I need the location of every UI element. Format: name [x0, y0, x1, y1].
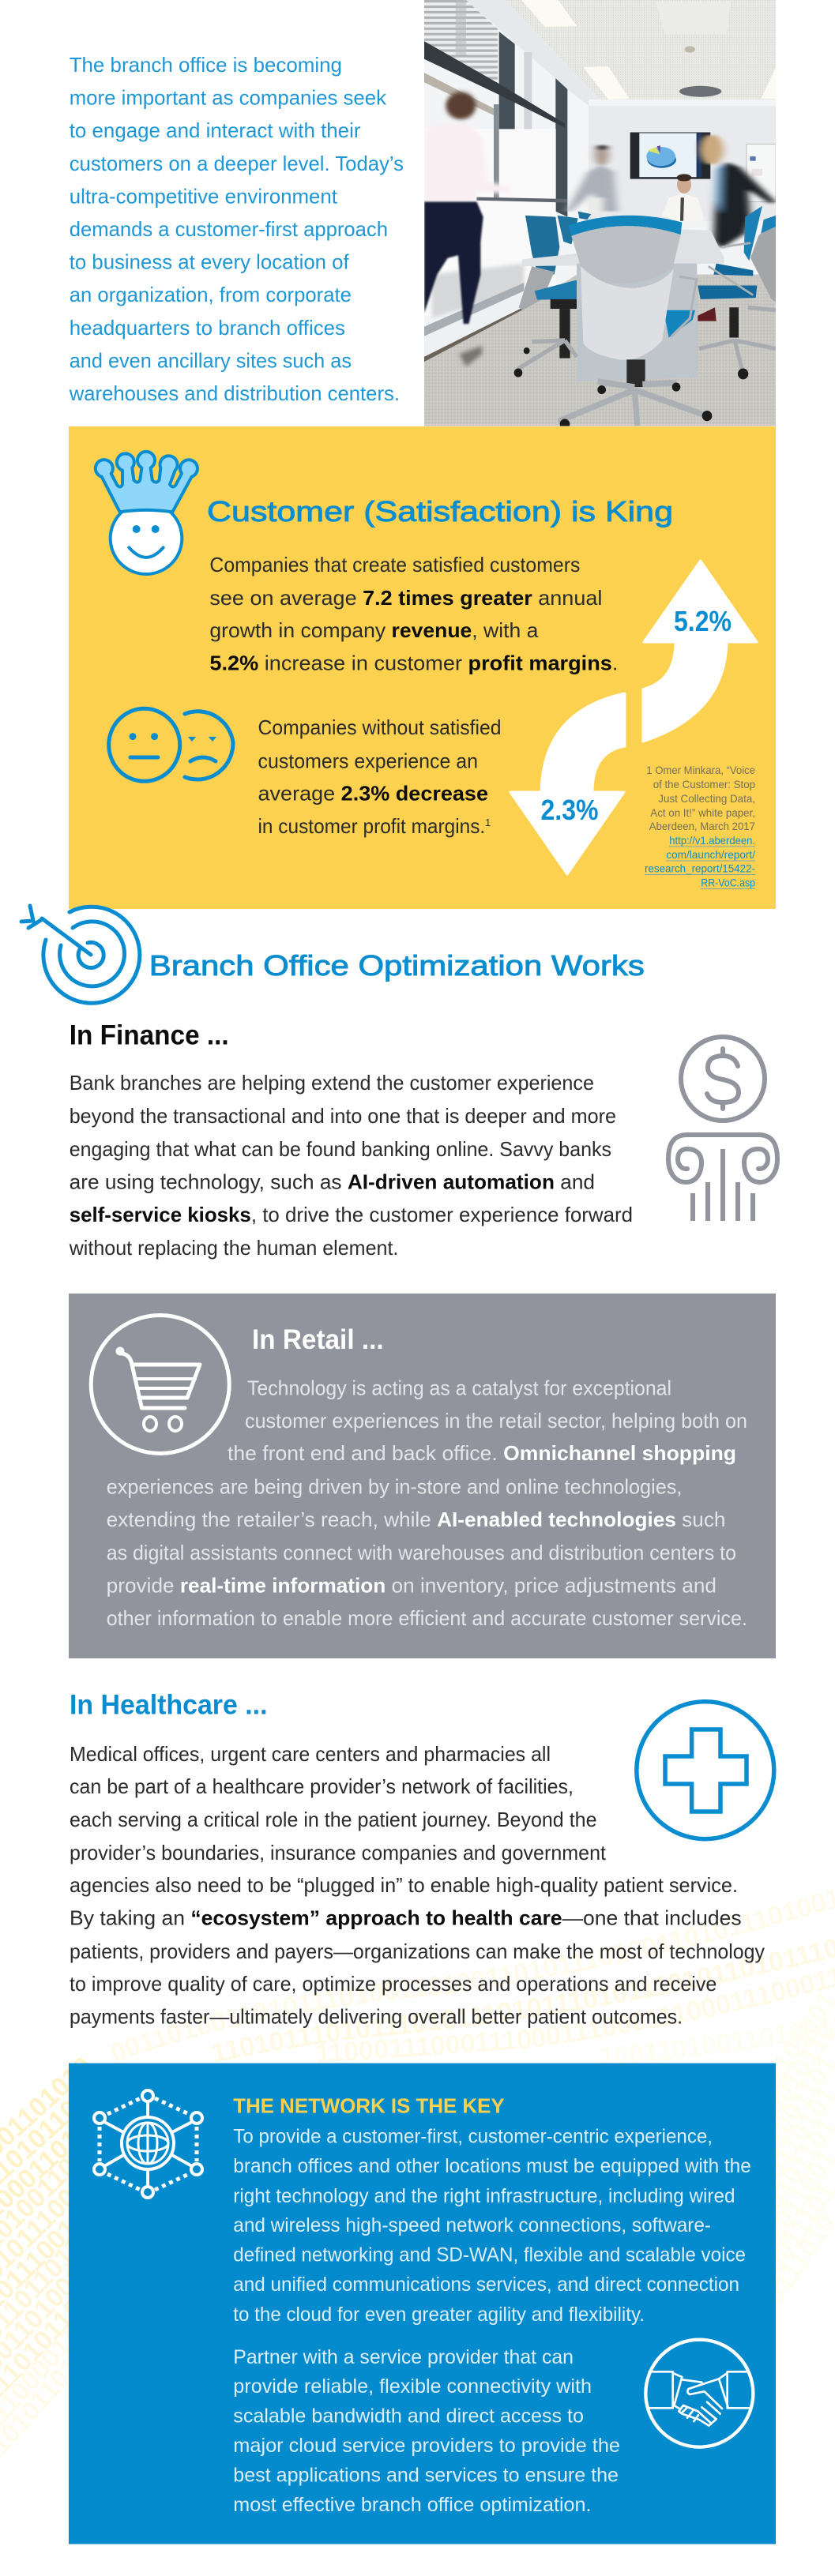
intro paragraph: [69, 53, 404, 405]
icon: dollar coin on column: [668, 1037, 777, 1221]
text: network second paragraph: Partner with a service provider that can: [233, 2346, 574, 2368]
right chair: [698, 206, 776, 379]
text: network second paragraph: provide reliable, flexible connectivity with: [233, 2375, 592, 2398]
text: finance body: Bank branches are helping extend the customer experience: [70, 1071, 594, 1095]
text: finance body: are using technology, such as AI-driven automation and: [70, 1170, 595, 1194]
text: healthcare body: to improve quality of care, optimize processes and operations and receive: [70, 1972, 717, 1996]
text: healthcare body: Medical offices, urgent care centers and pharmacies all: [70, 1742, 551, 1766]
text: healthcare body: each serving a critical role in the patient journey. Beyond the: [70, 1808, 597, 1831]
text: healthcare body: can be part of a healthcare provider’s network of facilities,: [70, 1774, 574, 1798]
arrow: down 2.3%: 2.3%: [540, 794, 599, 826]
text: retail body: other information to enable more efficient and accurate customer service.: [107, 1606, 747, 1630]
text: network second paragraph: [233, 2346, 620, 2516]
text: retail body: as digital assistants connect with warehouses and distribution centers to: [107, 1541, 736, 1564]
text: unsatisfied customers stat: average 2.3% decrease: [258, 782, 488, 805]
text: healthcare body: provider’s boundaries, insurance companies and government: [70, 1841, 607, 1864]
text: unsatisfied customers stat: in customer profit margins.: [258, 814, 500, 838]
footnote citation: http://v1.aberdeen.: [669, 834, 755, 847]
text: healthcare body: patients, providers and payers—organizations can make the most of technology: [70, 1940, 765, 1963]
text: retail body: Technology is acting as a catalyst for exceptional: [247, 1376, 671, 1400]
text: network first paragraph: branch offices and other locations must be equipped with the: [233, 2155, 751, 2177]
icon: smiling face with crown: [96, 452, 197, 574]
arrow: up 5.2%: [643, 561, 757, 742]
text: unsatisfied customers stat: 1: [485, 817, 491, 828]
panel: in retail: [69, 1294, 776, 1658]
intro paragraph: and even ancillary sites such as: [70, 348, 352, 372]
arrow: down 2.3%: [510, 693, 625, 874]
text: network first paragraph: [233, 2126, 751, 2326]
footnote citation: research_report/15422-: [645, 862, 755, 874]
text: retail body: the front end and back office. Omnichannel shopping: [228, 1441, 736, 1465]
text: network first paragraph: and unified communications services, and direct connection: [233, 2274, 739, 2296]
text: finance body: without replacing the human element.: [69, 1236, 398, 1260]
heading: in retail: In Retail ...: [252, 1324, 384, 1355]
intro paragraph: an organization, from corporate: [70, 283, 352, 306]
footnote citation: com/launch/report/: [666, 848, 755, 861]
text: retail body: experiences are being driven by in-store and online technologies,: [107, 1475, 682, 1499]
text: unsatisfied customers stat: [258, 715, 501, 838]
icon: shopping cart in circle: [91, 1316, 229, 1453]
text: network second paragraph: best applications and services to ensure the: [233, 2464, 619, 2486]
text: network second paragraph: major cloud service providers to provide the: [233, 2435, 620, 2457]
text: satisfied customers stat: see on average 7.2 times greater annual: [209, 586, 602, 610]
text: healthcare body: agencies also need to be “plugged in” to enable high-quality patient service.: [70, 1873, 738, 1897]
footnote citation: of the Customer: Stop: [653, 778, 755, 790]
intro paragraph: The branch office is becoming: [70, 53, 342, 77]
section: in healthcare: [70, 1690, 774, 2029]
footnote citation: Act on It!” white paper,: [650, 806, 755, 819]
heading: customer satisfaction: Customer (Satisfaction) is King: [207, 495, 673, 528]
footnote citation: [645, 764, 755, 889]
icon: network globe: [94, 2090, 202, 2198]
intro paragraph: to engage and interact with their: [70, 118, 361, 142]
text: network first paragraph: To provide a customer-first, customer-centric experience,: [233, 2126, 713, 2148]
intro paragraph: demands a customer-first approach: [70, 217, 388, 241]
left woman in motion: [424, 92, 511, 366]
intro paragraph: headquarters to branch offices: [70, 316, 345, 340]
arrow: up 5.2%: 5.2%: [674, 605, 732, 637]
panel: customer satisfaction is king: [69, 426, 776, 909]
icon: neutral and sad faces: [109, 708, 233, 781]
icon: target with arrow: [21, 906, 140, 1003]
intro paragraph: customers on a deeper level. Today’s: [70, 152, 404, 175]
text: satisfied customers stat: growth in company revenue, with a: [209, 618, 539, 642]
text: satisfied customers stat: 5.2% increase in customer profit margins .: [209, 651, 618, 674]
text: finance body: engaging that what can be found banking online. Savvy banks: [70, 1137, 611, 1161]
photo: office meeting room: [424, 0, 776, 430]
text: satisfied customers stat: [209, 553, 618, 674]
text: retail body: extending the retailer’s reach, while AI-enabled technologies such: [107, 1508, 725, 1531]
intro paragraph: ultra-competitive environment: [70, 184, 338, 208]
footnote citation: Aberdeen, March 2017: [649, 820, 755, 832]
text: finance body: [69, 1071, 633, 1260]
footnote citation: RR-VoC.asp: [701, 876, 755, 888]
heading: in healthcare: In Healthcare ...: [70, 1690, 267, 1721]
text: network first paragraph: right technology and the right infrastructure, including wired: [233, 2185, 735, 2207]
heading: in finance: In Finance ...: [70, 1020, 229, 1051]
text: network second paragraph: most effective branch office optimization.: [233, 2494, 591, 2516]
text: healthcare body: [70, 1742, 765, 2029]
background: faint binary digits pattern: 1101011101011101011101011101011101011010111010110101110101: [212, 1939, 835, 2063]
text: network first paragraph: and wireless high-speed network connections, software-: [233, 2214, 711, 2236]
heading: the network is the key: THE NETWORK IS THE KEY: [233, 2094, 505, 2118]
text: retail body: provide real-time information on inventory, price adjustments and: [107, 1574, 717, 1598]
background: faint binary digits pattern: 00110100110101110100110100110101110100110101110100110100110: [111, 1889, 835, 2061]
text: network first paragraph: to the cloud for even greater agility and flexibility.: [233, 2304, 645, 2326]
text: finance body: beyond the transactional and into one that is deeper and more: [70, 1104, 616, 1128]
intro paragraph: warehouses and distribution centers.: [69, 381, 400, 405]
text: network first paragraph: defined networking and SD-WAN, flexible and scalable voice: [233, 2244, 746, 2266]
text: unsatisfied customers stat: Companies without satisfied: [258, 715, 501, 739]
text: satisfied customers stat: Companies that create satisfied customers: [209, 553, 580, 576]
center chair: [559, 216, 712, 430]
icon: medical cross in circle: [637, 1702, 774, 1839]
text: network second paragraph: scalable bandwidth and direct access to: [233, 2405, 584, 2428]
section: in finance: [69, 1020, 777, 1260]
text: retail body: [107, 1376, 747, 1630]
intro paragraph: more important as companies seek: [70, 86, 387, 110]
text: finance body: self-service kiosks, to drive the customer experience forward: [70, 1203, 633, 1226]
text: healthcare body: By taking an “ecosystem” approach to health care —one that includes: [70, 1906, 742, 1930]
text: retail body: customer experiences in the retail sector, helping both on: [245, 1409, 747, 1433]
icon: handshake in circle: [645, 2340, 753, 2447]
TV with pie chart: [630, 133, 710, 179]
intro paragraph: to business at every location of: [70, 250, 349, 274]
panel: the network is the key: [69, 2063, 776, 2544]
footnote citation: 1 Omer Minkara, “Voice: [646, 764, 755, 776]
text: healthcare body: payments faster—ultimately delivering overall better patient outcomes.: [70, 2005, 683, 2029]
text: unsatisfied customers stat: customers experience an: [258, 749, 478, 773]
heading: branch office optimization works: Branch Office Optimization Works: [149, 949, 645, 982]
footnote citation: Just Collecting Data,: [658, 792, 755, 805]
